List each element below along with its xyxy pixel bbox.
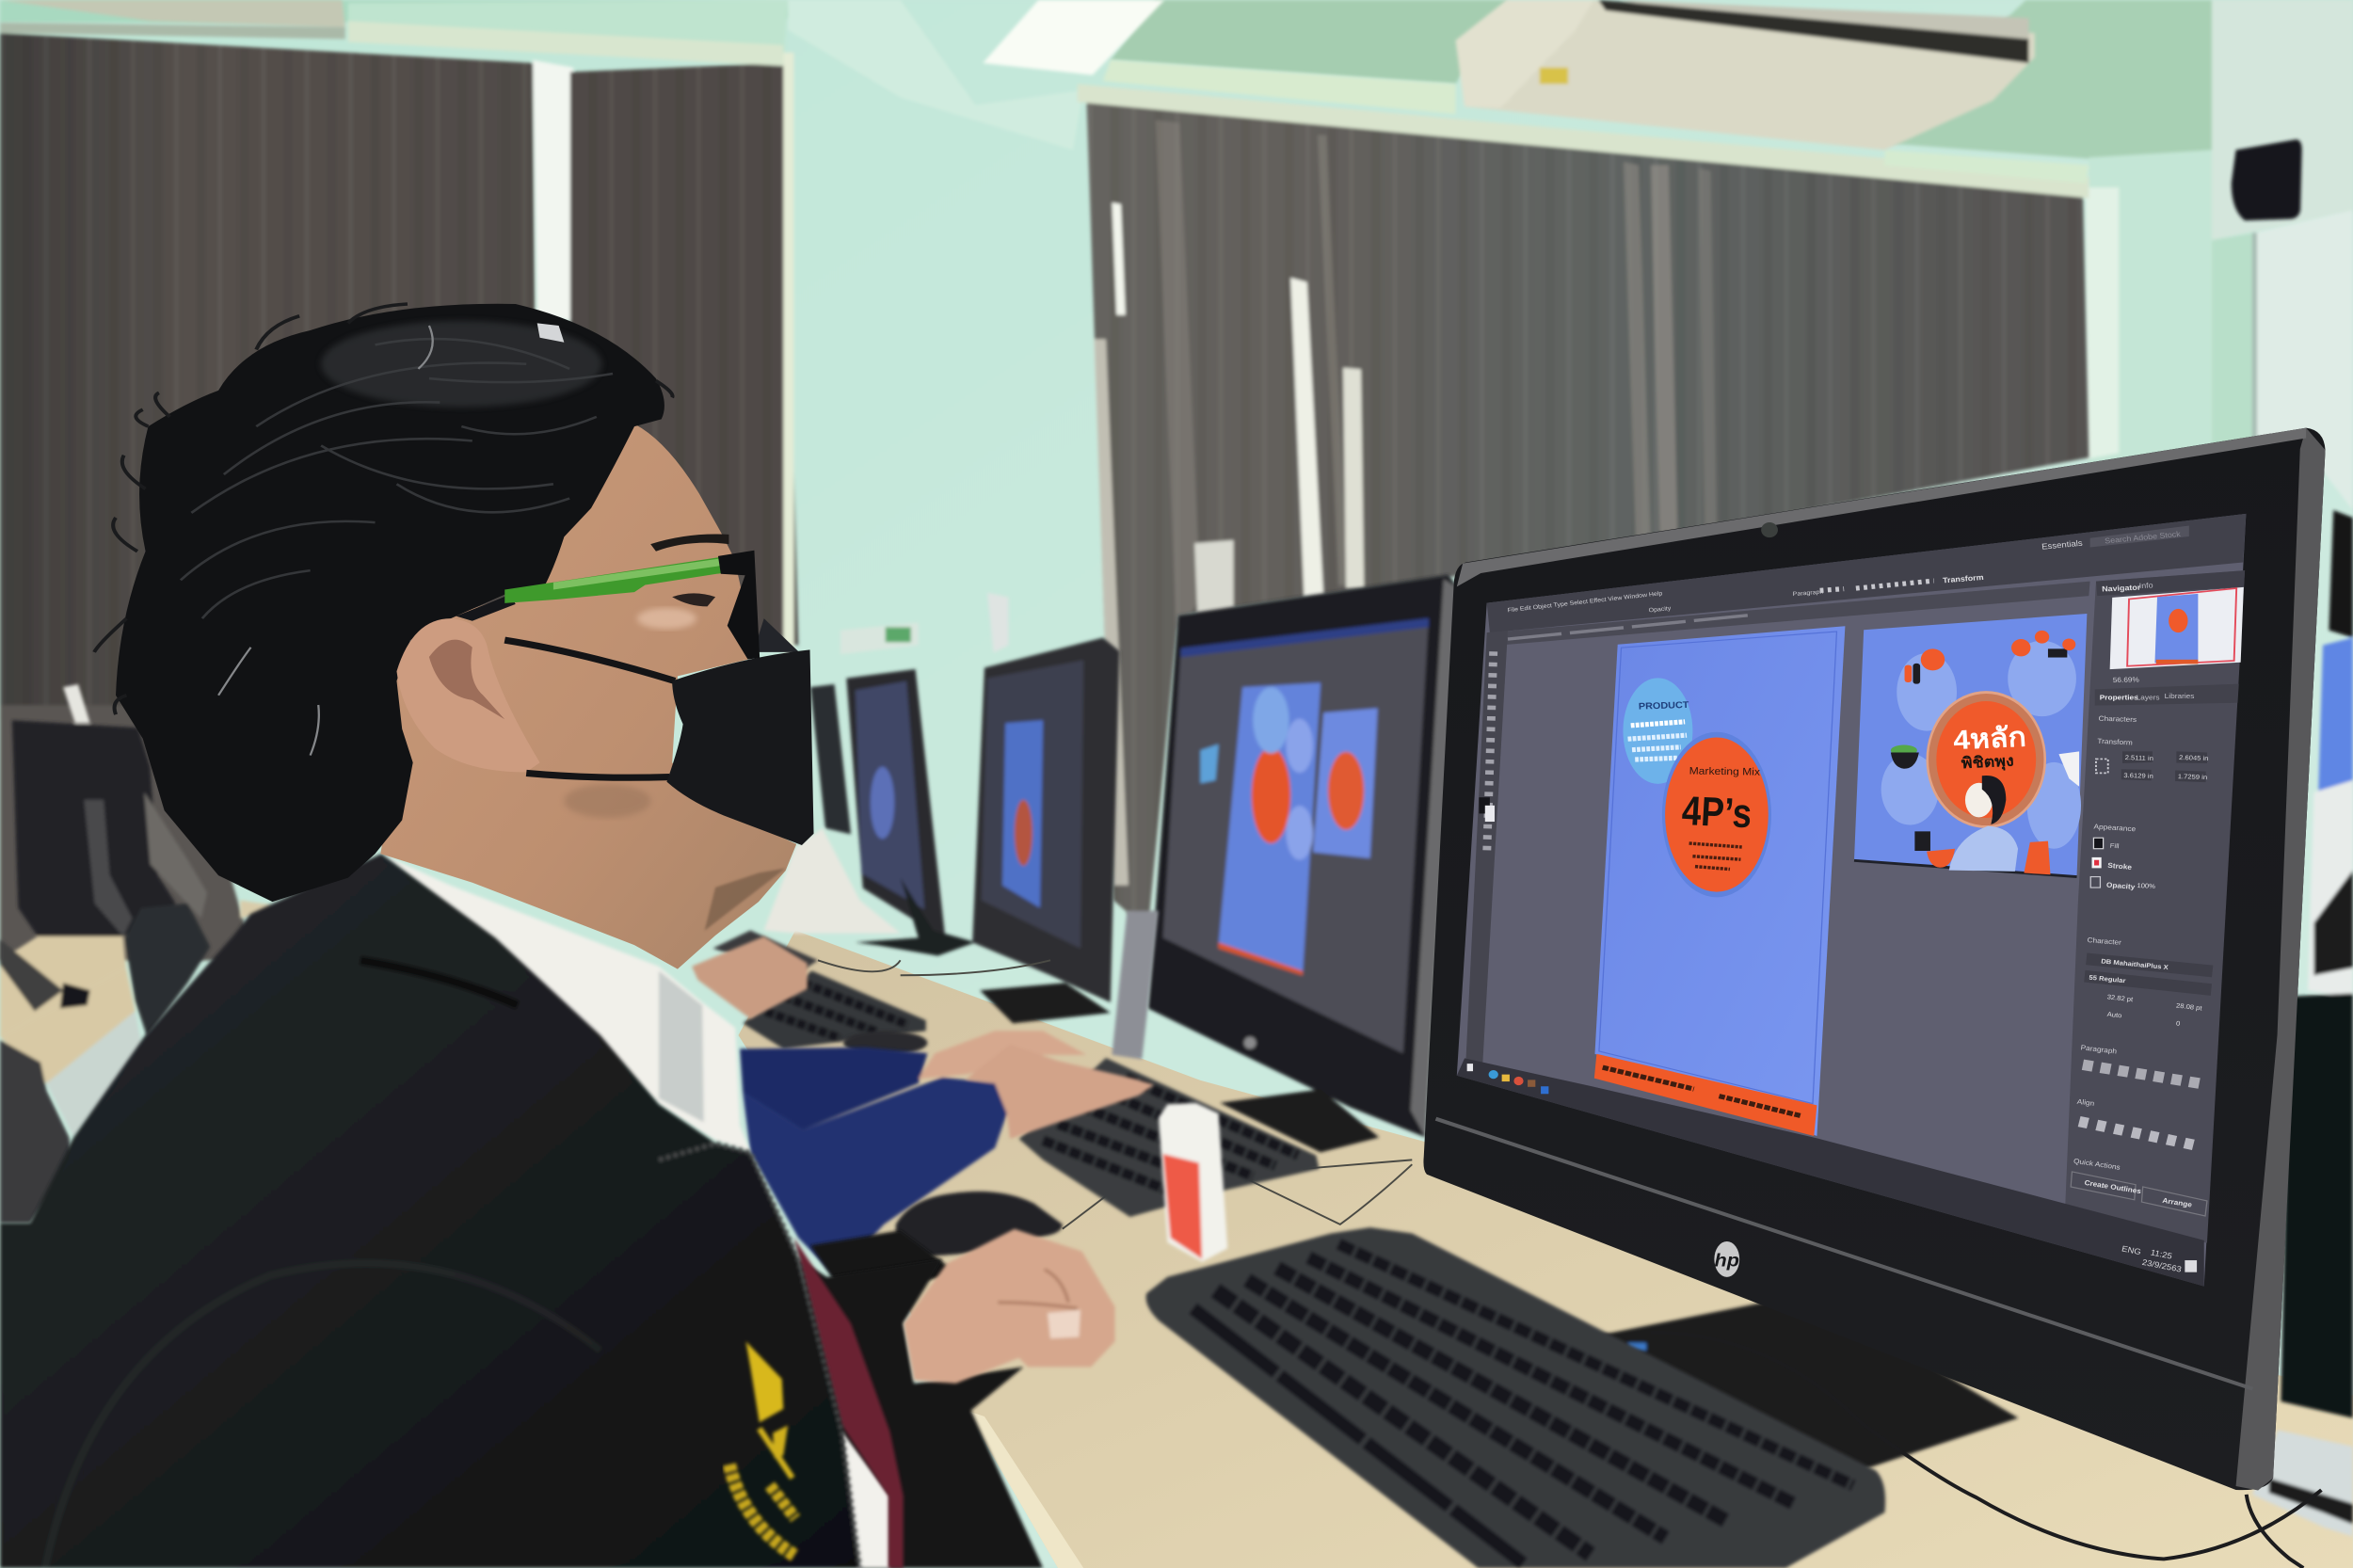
clock and weights icon	[2011, 631, 2075, 658]
transform fields: 2.5111 in	[2124, 753, 2153, 762]
windows taskbar: 23/9/2563	[2141, 1257, 2183, 1273]
jacket embroidered logo	[729, 1341, 795, 1556]
product bubble	[1623, 678, 1692, 784]
main student	[0, 304, 1115, 1568]
appearance controls	[2090, 838, 2156, 891]
keyboard: far	[712, 930, 926, 1048]
right properties panel: Transform	[2097, 737, 2133, 746]
right properties panel: Libraries	[2165, 693, 2194, 700]
ceiling light	[983, 0, 1164, 75]
stubble	[705, 868, 786, 931]
desk grommet plate	[2252, 1430, 2353, 1537]
tools panel	[1465, 631, 1508, 1064]
application top bars: Search Adobe Stock	[2105, 529, 2182, 545]
character fields: 32.82 pt	[2106, 993, 2134, 1003]
right properties panel: Align	[2076, 1097, 2095, 1108]
application top bars: Paragraph	[1792, 589, 1824, 598]
artboard 1	[1594, 626, 1845, 1136]
computer mouse	[896, 1192, 1063, 1257]
right properties panel: Paragraph	[2080, 1044, 2118, 1055]
hair highlights	[181, 339, 613, 618]
second monitor	[1148, 575, 1459, 1152]
artboard 2: poster	[1854, 614, 2087, 877]
right properties panel: Info	[2138, 581, 2153, 590]
quick action buttons: Arrange	[2162, 1196, 2193, 1209]
transform fields: 2.6045 in	[2179, 753, 2209, 762]
right properties panel: Appearance	[2093, 823, 2137, 833]
jacket sleeve	[798, 1259, 1043, 1568]
orange 4P's circle: Marketing Mix	[1689, 766, 1760, 778]
desk cables	[818, 960, 1412, 1229]
right properties panel: Characters	[2098, 714, 2137, 724]
application top bars: Transform	[1943, 572, 1984, 584]
character fields: 55 Regular	[2089, 973, 2126, 984]
curtains: right window	[1078, 60, 2089, 930]
bowl icon	[1891, 745, 1919, 769]
poster central circle: 4หลัก	[1952, 723, 2027, 756]
hand	[904, 1229, 1115, 1384]
phone on desk	[1112, 911, 1159, 1060]
windows taskbar: 11:25	[2150, 1248, 2173, 1260]
cheek shine	[637, 608, 696, 629]
character fields: DB MahaithaiPlus X	[2101, 957, 2169, 971]
ear	[396, 618, 540, 772]
screen: illustrator workspace	[1457, 514, 2246, 1287]
windows taskbar	[1457, 1058, 2204, 1287]
transform fields	[2096, 751, 2209, 782]
necktie	[793, 1238, 904, 1568]
character fields: Auto	[2106, 1010, 2122, 1019]
second student: far hand	[692, 936, 808, 1019]
curtains: left window	[0, 0, 798, 960]
black face mask	[666, 618, 814, 845]
air conditioner	[1456, 0, 2035, 150]
wall speaker	[2232, 139, 2302, 220]
right properties panel: Character	[2087, 936, 2122, 947]
application top bars: Essentials	[2041, 538, 2084, 552]
right properties panel	[2065, 570, 2245, 1243]
appearance controls: Fill	[2109, 841, 2120, 850]
product bubble: PRODUCT	[1639, 700, 1689, 712]
jacket	[0, 854, 860, 1568]
character fields: 28.08 pt	[2176, 1001, 2202, 1012]
orange 4P's circle: 4P’s	[1681, 787, 1753, 837]
neck and face	[380, 424, 796, 969]
orange 4P's circle	[1662, 732, 1771, 897]
transform fields: 3.6129 in	[2123, 771, 2153, 780]
second student: sleeves and hands	[740, 1031, 1154, 1277]
right properties panel: Navigator	[2102, 583, 2141, 593]
monitor power cables	[1651, 1333, 2321, 1568]
under-desk shadow	[810, 1230, 960, 1290]
right properties panel: Layers	[2137, 694, 2160, 701]
poster woman illustration	[1914, 776, 2050, 874]
glasses	[456, 551, 760, 660]
hp logo	[1714, 1241, 1739, 1277]
poster central circle	[1926, 691, 2046, 828]
orange footer strip	[1594, 1054, 1817, 1136]
right edge: neighbouring student and monitor	[2281, 510, 2353, 1418]
mask straps	[504, 640, 675, 777]
appearance controls: 100%	[2137, 881, 2156, 890]
keyboard: middle	[1019, 1058, 1319, 1217]
dumbbell and heart icon	[1905, 648, 1945, 684]
far mouse	[843, 1031, 927, 1055]
right properties panel: Quick Actions	[2073, 1157, 2121, 1172]
transform fields: 1.7259 in	[2178, 772, 2207, 781]
navigator thumbnail	[2110, 587, 2244, 669]
hand sanitizer bottle	[1159, 1103, 1227, 1262]
hair wisps	[94, 304, 673, 714]
head, drawn in zoom coordinates	[94, 304, 814, 969]
back wall sockets and notes	[840, 593, 1008, 654]
eyebrow and eye	[650, 534, 728, 606]
monitor body	[1423, 428, 2326, 1490]
application top bars: Opacity	[1648, 605, 1672, 614]
quick action buttons	[2071, 1172, 2207, 1216]
main monitor, drawn in zoom coordinates	[1423, 428, 2326, 1491]
appearance controls: Stroke	[2107, 861, 2133, 872]
quick action buttons: Create Outlines	[2084, 1178, 2142, 1195]
hair sheen	[321, 321, 602, 408]
windows taskbar: ENG	[2121, 1244, 2142, 1256]
character fields: 0	[2176, 1019, 2181, 1028]
rear monitors row	[764, 638, 1119, 1023]
application top bars	[1487, 514, 2246, 646]
left side desk, chairs and monitors	[0, 684, 273, 1223]
hair	[116, 304, 664, 902]
desk	[738, 930, 2353, 1568]
shirt collar	[381, 854, 889, 1568]
application top bars: File Edit Object Type Select Effect View Window Help	[1507, 590, 1663, 614]
main monitor stand	[1598, 1293, 2018, 1470]
webcam	[1761, 522, 1778, 537]
exercising legs icon	[2058, 751, 2079, 787]
hp logo: hp	[1715, 1250, 1739, 1271]
appearance controls: Opacity	[2106, 881, 2136, 891]
right properties panel: Properties	[2100, 694, 2138, 701]
main keyboard	[1146, 1227, 1885, 1568]
character fields	[2084, 952, 2213, 1028]
right properties panel: 56.69%	[2113, 676, 2139, 684]
poster central circle: พิชิตพุง	[1961, 752, 2014, 773]
